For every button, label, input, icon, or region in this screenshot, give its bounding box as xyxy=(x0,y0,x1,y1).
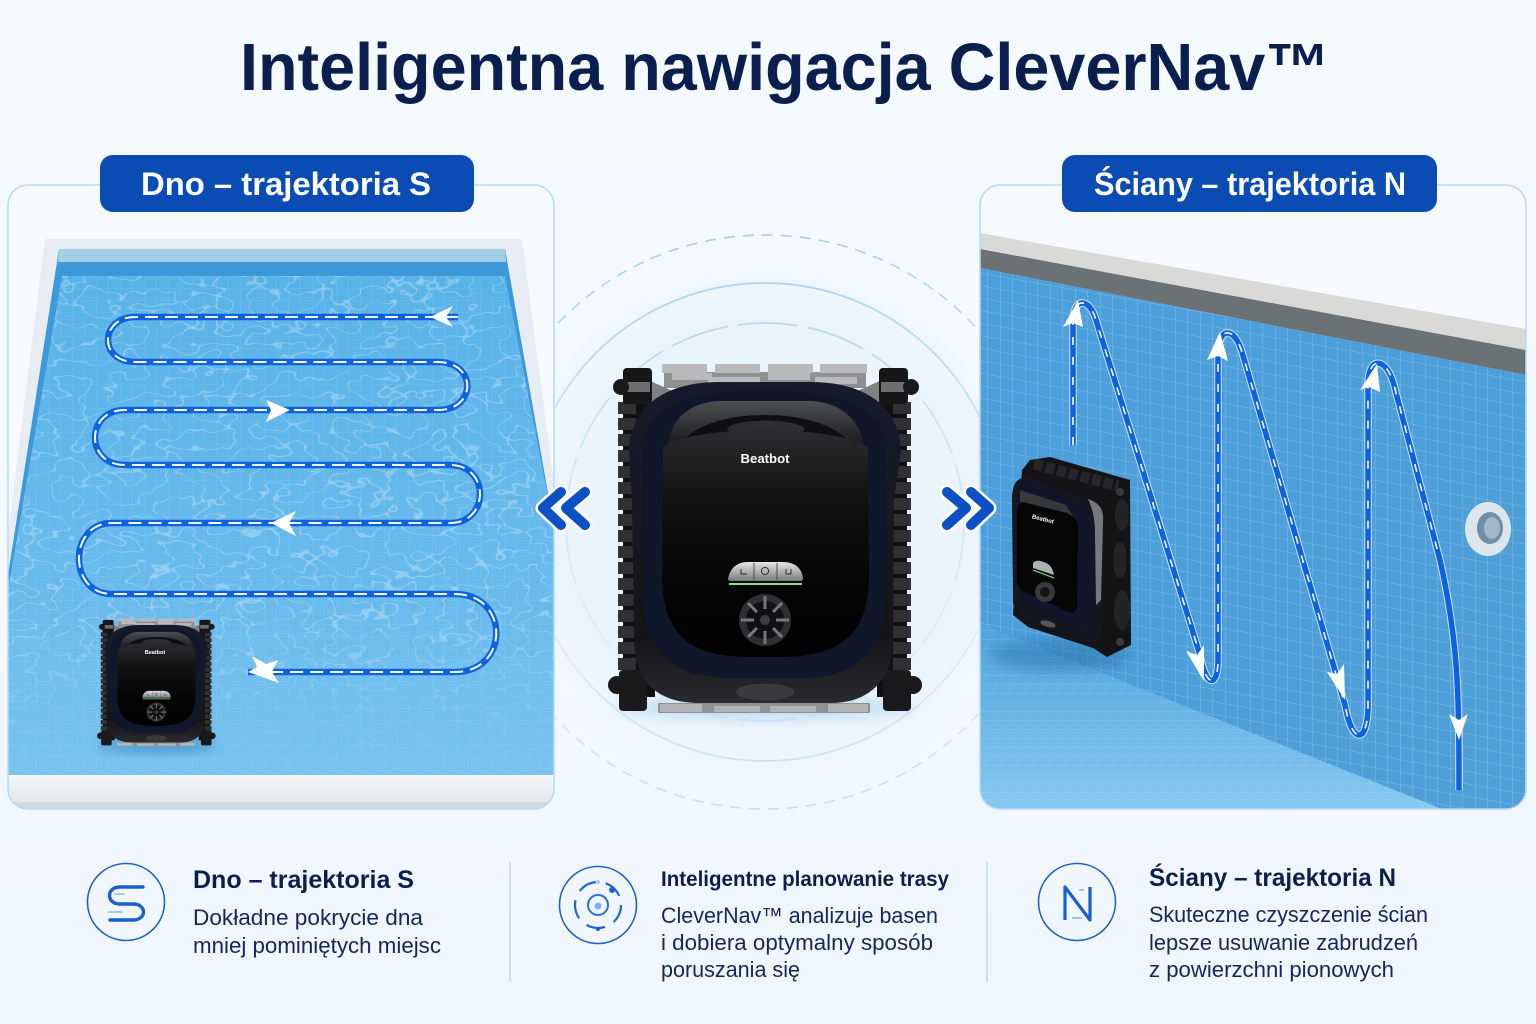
description: Dokładne pokrycie dna xyxy=(193,905,424,930)
icon: robot on pool wall xyxy=(1012,457,1131,657)
tracks xyxy=(608,368,922,711)
description: i dobiera optymalny sposób xyxy=(661,930,933,955)
heading: Ściany – trajektoria N xyxy=(1149,862,1396,892)
brand label: Beatbot xyxy=(740,451,790,466)
description xyxy=(193,905,441,958)
central robot xyxy=(608,364,922,720)
path arrowheads xyxy=(1063,300,1468,740)
control buttons xyxy=(728,562,803,584)
heading pill: floor xyxy=(100,155,474,212)
robot shell xyxy=(629,382,901,703)
title: Inteligentna nawigacja CleverNav™ xyxy=(240,30,1330,105)
description: mniej pominiętych miejsc xyxy=(193,933,441,958)
fan xyxy=(739,594,791,646)
heading pill: walls: Ściany – trajektoria N xyxy=(1094,166,1406,202)
description: poruszania się xyxy=(661,957,800,982)
description: CleverNav™ analizuje basen xyxy=(661,903,938,928)
description xyxy=(661,903,938,982)
radar rings behind central robot xyxy=(469,226,1061,818)
description: lepsze usuwanie zabrudzeń xyxy=(1149,930,1418,955)
arrow: double chevron left xyxy=(543,492,585,525)
intake window xyxy=(668,401,864,450)
panel: pool floor with S path xyxy=(8,185,554,809)
brand label wall: Beatbot xyxy=(1031,514,1054,526)
brush rollers xyxy=(658,364,870,713)
feature: route planning xyxy=(560,866,949,982)
panel border xyxy=(980,185,1526,809)
feature: floor S path xyxy=(88,864,441,958)
heading: Dno – trajektoria S xyxy=(193,866,414,894)
arrow: double chevron right xyxy=(947,492,989,525)
S trajectory xyxy=(79,317,496,672)
path arrowheads xyxy=(248,306,453,683)
lid xyxy=(662,430,869,657)
heading: Inteligentne planowanie trasy xyxy=(661,868,949,891)
drain fitting xyxy=(1465,502,1511,556)
description: Skuteczne czyszczenie ścian xyxy=(1149,902,1428,927)
wall illustration xyxy=(980,185,1526,809)
description: z powierzchni pionowych xyxy=(1149,957,1394,982)
description xyxy=(1149,902,1428,982)
icon: N path xyxy=(1038,864,1116,940)
panel: pool walls with N path xyxy=(980,185,1526,809)
front badge xyxy=(736,684,794,700)
brand label small: Beatbot xyxy=(145,650,165,656)
heading pill: walls xyxy=(1062,155,1437,212)
icon: robot on pool floor xyxy=(97,618,218,753)
icon: S path xyxy=(88,864,164,940)
pool illustration xyxy=(8,185,554,809)
feature: walls N path xyxy=(1038,862,1428,982)
N trajectory xyxy=(1073,303,1459,790)
heading pill: floor: Dno – trajektoria S xyxy=(141,166,431,202)
panel border xyxy=(8,185,554,809)
icon: orbit xyxy=(560,866,636,944)
